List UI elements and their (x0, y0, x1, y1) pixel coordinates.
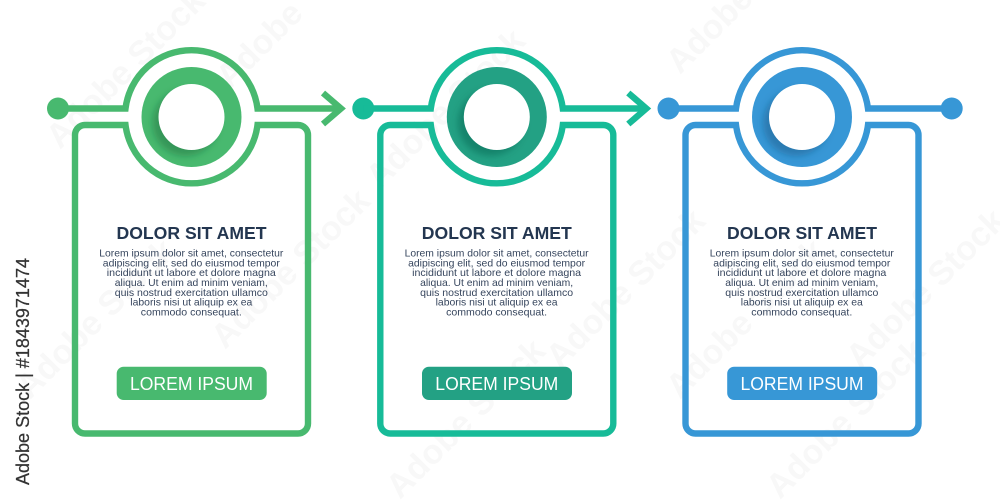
body text: aliqua. Ut enim ad minim veniam, (420, 278, 573, 289)
icon: donut disc with shadow (142, 67, 242, 167)
body text: commodo consequat. (141, 307, 242, 318)
body text: Lorem ipsum dolor sit amet, consectetur (405, 249, 589, 260)
arrow head (323, 93, 341, 124)
button: LOREM IPSUM (740, 373, 864, 394)
faint stock watermarks: Adobe Stock (359, 22, 533, 196)
body text: adipiscing elit, sed do eiusmod tempor (103, 258, 280, 269)
faint stock watermarks: Adobe Stock (9, 232, 183, 406)
body text: laboris nisi ut aliquip ex ea (130, 298, 253, 309)
button: LOREM IPSUM (435, 373, 558, 394)
icon: donut disc with shadow (752, 67, 852, 167)
body text: Lorem ipsum dolor sit amet, consectetur (710, 249, 894, 260)
body text (99, 249, 284, 318)
body text: laboris nisi ut aliquip ex ea (436, 298, 558, 309)
body text: incididunt ut labore et dolore magna (412, 268, 581, 279)
stock id side label: Adobe Stock | #1843971474 (13, 258, 33, 485)
card outline with ring bottom (75, 125, 308, 434)
body text: aliqua. Ut enim ad minim veniam, (115, 278, 268, 289)
body text: commodo consequat. (751, 307, 852, 318)
body text: incididunt ut labore et dolore magna (107, 268, 276, 279)
body text: Lorem ipsum dolor sit amet, consectetur (99, 249, 284, 260)
button (117, 367, 267, 400)
step 3: blue panel (658, 50, 963, 433)
connector line with ring top and both end dots (658, 50, 963, 120)
heading: DOLOR SIT AMET (116, 223, 267, 243)
faint stock watermarks: Adobe Stock (204, 182, 378, 356)
body text (710, 249, 894, 318)
body text: incididunt ut labore et dolore magna (717, 268, 887, 279)
button (727, 367, 877, 400)
body text: quis nostrud exercitation ullamco (115, 288, 268, 299)
button (422, 367, 572, 400)
button: LOREM IPSUM (130, 373, 253, 394)
body text: aliqua. Ut enim ad minim veniam, (725, 278, 878, 289)
body text: quis nostrud exercitation ullamco (420, 288, 573, 299)
card outline with ring bottom (380, 125, 613, 434)
faint stock watermarks: Adobe Stock (539, 202, 713, 376)
body text: laboris nisi ut aliquip ex ea (741, 298, 863, 309)
body text: quis nostrud exercitation ullamco (725, 288, 879, 299)
step 1: green panel (47, 50, 341, 433)
connector line with ring top and start dot (47, 50, 339, 120)
icon: donut disc with shadow (447, 67, 547, 167)
body text: adipiscing elit, sed do eiusmod tempor (408, 258, 586, 269)
step 2: teal panel (352, 50, 646, 433)
faint stock watermarks: Adobe Stock (659, 232, 833, 406)
heading: DOLOR SIT AMET (422, 223, 572, 243)
body text: commodo consequat. (446, 307, 547, 318)
card outline with ring bottom (686, 125, 918, 434)
heading: DOLOR SIT AMET (727, 223, 877, 243)
body text: adipiscing elit, sed do eiusmod tempor (713, 258, 891, 269)
connector line with ring top and start dot (352, 50, 644, 120)
arrow head (628, 93, 646, 124)
body text (405, 249, 589, 318)
